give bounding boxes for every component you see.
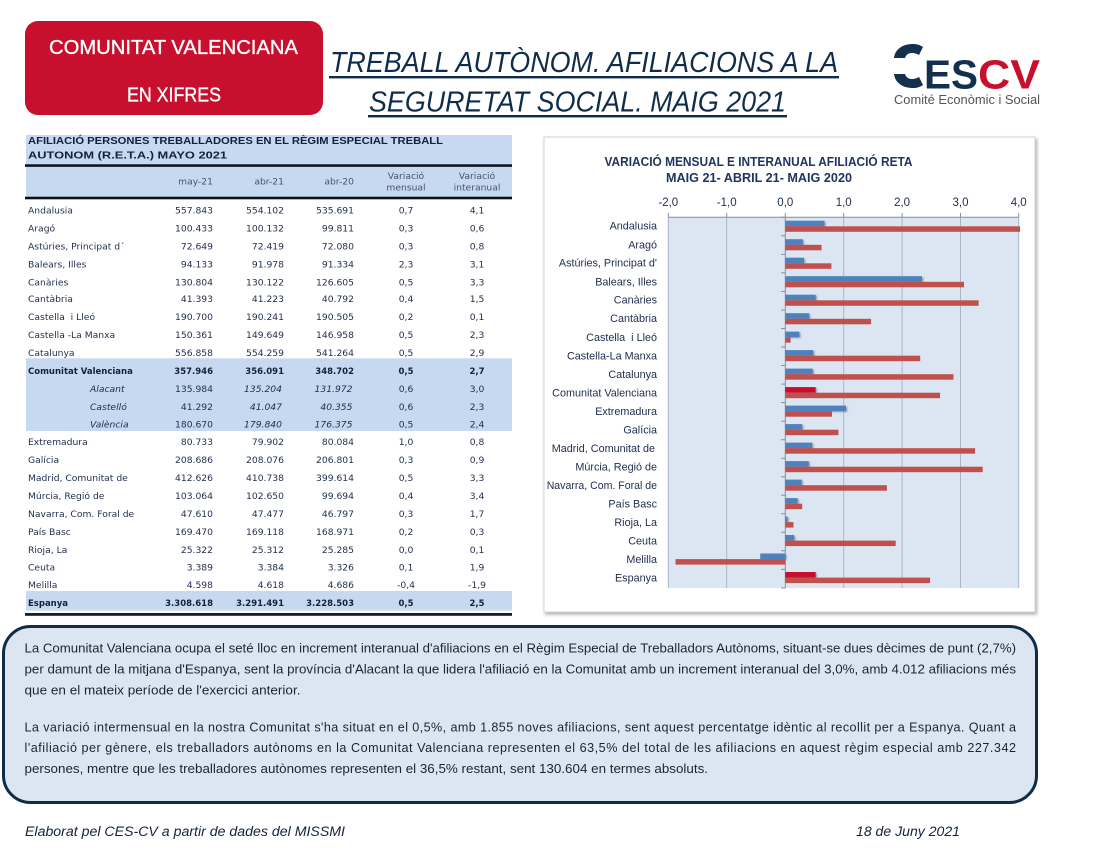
row: Madrid: 399.614: [316, 473, 354, 484]
row: Cantàbria: 41.393: [181, 294, 213, 305]
row: Castella-La Manxa: 146.958: [316, 330, 354, 341]
table header row: [25, 164, 512, 199]
row: Múrcia: 0,4: [399, 491, 413, 502]
axis labels: 1,0: [836, 197, 852, 209]
row: Aragó: 0,3: [399, 223, 413, 234]
chart title: VARIACIÓ MENSUAL E INTERANUAL AFILIACIÓ RETA: [604, 154, 913, 169]
badge: Comunitat Valenciana en xifres: COMUNITAT VALENCIANA: [49, 36, 298, 59]
row: Comunitat Valenciana: 348.702: [315, 367, 354, 377]
row: Extremadura: 0,8: [470, 437, 484, 448]
row: Extremadura: 80.084: [322, 437, 354, 448]
row: Espanya: Espanya: [28, 599, 68, 609]
category labels: Rioja, La: [614, 517, 657, 529]
row: Catalunya: 554.259: [246, 348, 284, 359]
chart title: [604, 154, 913, 185]
axis labels: -2,0: [658, 197, 678, 209]
axis labels: -1,0: [717, 197, 737, 209]
row: Castella i Lleó: [28, 312, 484, 323]
footer: source: Elaborat pel CES-CV a partir de dades del MISSMI: [25, 824, 345, 839]
category labels: Balears, Illes: [595, 276, 658, 288]
row: Extremadura: Extremadura: [28, 437, 88, 448]
row: Ceuta: 0,1: [399, 562, 413, 574]
row: Castella-La Manxa: 150.361: [175, 330, 213, 341]
row: País Basc: [28, 527, 484, 538]
category labels: Extremadura: [595, 406, 657, 418]
row: Comunitat Valenciana: 2,7: [469, 367, 485, 377]
row: Extremadura: 80.733: [181, 437, 213, 448]
row: Castella i Lleó: Castella i Lleó: [28, 312, 95, 323]
row: Castella i Lleó: 190.241: [246, 312, 284, 323]
category labels: Melilla: [626, 554, 657, 566]
row: Castella-La Manxa: 0,5: [399, 330, 413, 341]
row: Canàries: 130.122: [246, 277, 284, 288]
row: Navarra: 47.477: [252, 509, 284, 520]
row: Cantàbria: 0,4: [399, 294, 413, 305]
row: Galícia: 208.076: [246, 455, 284, 466]
row: Múrcia: [28, 491, 484, 502]
category labels: Espanya: [615, 572, 657, 584]
row: Alacant: 135.204: [244, 384, 282, 395]
row: Andalusia: [28, 205, 484, 216]
row: Canàries: 130.804: [175, 277, 213, 288]
row: Castella i Lleó: 0,2: [399, 312, 413, 323]
row: País Basc: 168.971: [316, 527, 354, 538]
row: Comunitat Valenciana: 356.091: [245, 367, 284, 377]
title: TREBALL AUTÒNOM. AFILIACIONS A LA: [330, 47, 838, 79]
row: Andalusia: 0,7: [399, 205, 413, 216]
row: Catalunya: [28, 348, 484, 359]
row: Balears: 94.133: [181, 259, 213, 270]
row: Navarra: 1,7: [470, 509, 484, 520]
row: Ceuta: [28, 562, 484, 574]
row: Galícia: 0,3: [399, 455, 413, 466]
row: Rioja: 25.312: [252, 545, 284, 556]
row: Cantàbria: 41.223: [252, 294, 284, 305]
row: Castella-La Manxa: [28, 330, 484, 341]
panel: bar chart: [544, 137, 1035, 612]
row: Andalusia: 4,1: [470, 205, 484, 216]
row: Alacant: 131.972: [314, 384, 353, 395]
bars: variació mensual: [760, 221, 922, 578]
row: Canàries: [28, 277, 484, 288]
row: Múrcia: 99.694: [322, 491, 354, 502]
row: Cantàbria: 40.792: [322, 294, 354, 305]
row: Rioja: 25.285: [322, 545, 354, 556]
row: Canàries: Canàries: [28, 277, 68, 288]
row: Catalunya: 0,5: [399, 348, 413, 359]
logo: CES-CV: [894, 44, 1041, 107]
row: Aragó: [28, 223, 484, 234]
row: València: València: [90, 420, 129, 430]
paragraph 2: [24, 720, 1016, 776]
row: Espanya: 0,5: [398, 599, 414, 609]
row: Madrid: 410.738: [246, 473, 284, 484]
category labels: Comunitat Valenciana: [552, 388, 657, 400]
row: País Basc: País Basc: [28, 527, 71, 538]
row: València: [90, 420, 484, 430]
row: Andalusia: 557.843: [175, 205, 213, 216]
table header row: abr-21: [254, 176, 284, 188]
category labels: Catalunya: [608, 369, 657, 381]
row: Aragó: 0,6: [470, 223, 484, 234]
highlight band: Comunitat Valenciana: [26, 358, 512, 431]
row: Rioja: [28, 545, 484, 556]
row: Castella-La Manxa: 2,3: [470, 330, 484, 341]
row: Navarra: 0,3: [399, 509, 413, 520]
table header row: Variació: [459, 171, 496, 182]
axis labels: 4,0: [1011, 197, 1027, 209]
highlight band: Espanya: [26, 591, 512, 610]
row: Balears: [28, 259, 484, 270]
row: Navarra: Navarra, Com. Foral de: [28, 509, 135, 520]
row: Navarra: [28, 509, 484, 520]
row: Múrcia: 102.650: [246, 491, 284, 502]
row: Castella i Lleó: 0,1: [470, 312, 484, 323]
row: Aragó: 100.433: [175, 223, 213, 234]
bars: variació interanual: [676, 226, 1020, 583]
table header row: may-21: [178, 176, 213, 188]
row: Catalunya: 556.858: [175, 348, 213, 359]
row: Comunitat Valenciana: 357.946: [174, 367, 213, 377]
row: Espanya: 3.308.618: [165, 599, 213, 609]
row: Melilla: 4.598: [187, 580, 213, 591]
row: Navarra: 47.610: [181, 509, 213, 520]
logo: CES-CV: ES: [924, 52, 978, 98]
axis labels: 3,0: [952, 197, 968, 209]
row: Catalunya: 541.264: [316, 348, 354, 359]
row: Madrid: 0,5: [399, 473, 413, 484]
row: Comunitat Valenciana: [28, 367, 485, 377]
row: Madrid: Madrid, Comunitat de: [28, 473, 128, 484]
row: València: 176.375: [314, 420, 353, 430]
row: Ceuta: 3.384: [258, 562, 284, 574]
row: Rioja: 25.322: [181, 545, 213, 556]
row: Espanya: 3.228.503: [306, 599, 354, 609]
title: [329, 47, 839, 118]
row: Cantàbria: 1,5: [470, 294, 484, 305]
row: Madrid: 3,3: [470, 473, 484, 484]
paragraph 1: que en el mateix període de l'exercici anterior.: [24, 684, 300, 698]
table header row: interanual: [454, 182, 500, 194]
row: Alacant: Alacant: [89, 384, 125, 395]
row: Castella i Lleó: 190.700: [175, 312, 213, 323]
row: Astúries: 0,8: [470, 241, 484, 252]
row: Extremadura: [28, 437, 484, 448]
row: Rioja: 0,1: [470, 545, 484, 556]
row: Castelló: 0,6: [399, 402, 413, 413]
row: Melilla: -1,9: [468, 580, 486, 591]
row: Andalusia: 535.691: [316, 205, 354, 216]
logo: CES-CV: Comité Econòmic i Social: [894, 93, 1040, 107]
footer: date: 18 de Juny 2021: [856, 824, 960, 839]
row: Castelló: 2,3: [470, 402, 484, 413]
axis labels: 2,0: [894, 197, 910, 209]
row: Aragó: 100.132: [246, 223, 284, 234]
row: Melilla: 4.686: [328, 580, 354, 591]
axis labels: 0,0: [777, 197, 793, 209]
row: Canàries: 126.605: [316, 277, 354, 288]
axis labels: [658, 197, 1027, 209]
row: Astúries: Astúries, Principat d´: [28, 241, 125, 252]
row: Ceuta: 3.326: [328, 562, 354, 574]
row: Castelló: 41.292: [181, 402, 213, 413]
table bottom rule: [25, 613, 512, 616]
title: SEGURETAT SOCIAL. MAIG 2021: [369, 86, 786, 118]
row: Madrid: 412.626: [175, 473, 213, 484]
row: Galícia: Galícia: [28, 455, 59, 466]
badge: Comunitat Valenciana en xifres: [25, 21, 323, 115]
row: Castella i Lleó: 190.505: [316, 312, 354, 323]
row: Extremadura: 79.902: [252, 437, 284, 448]
row: País Basc: 169.470: [175, 527, 213, 538]
row: Ceuta: Ceuta: [28, 562, 55, 574]
row: Comunitat Valenciana: 0,5: [398, 367, 414, 377]
chart title: MAIG 21- ABRIL 21- MAIG 2020: [666, 170, 852, 185]
row: Andalusia: Andalusia: [28, 205, 73, 216]
row: Canàries: 0,5: [399, 277, 413, 288]
row: Navarra: 46.797: [322, 509, 354, 520]
row: Melilla: 4.618: [258, 580, 284, 591]
row: Castelló: [90, 402, 484, 413]
row: Cantàbria: [28, 294, 484, 305]
row: València: 180.670: [175, 420, 213, 430]
row: Balears: 91.334: [322, 259, 354, 270]
row: Alacant: 3,0: [470, 384, 484, 395]
row: Alacant: 0,6: [399, 384, 413, 395]
category labels: Aragó: [628, 240, 657, 252]
row: Comunitat Valenciana: Comunitat Valenciana: [28, 367, 133, 377]
row: Astúries: 72.080: [322, 241, 354, 252]
logo: CES-CV: CV: [978, 52, 1041, 98]
row: Galícia: 206.801: [316, 455, 354, 466]
category labels: Astúries, Principat d': [559, 258, 657, 270]
row: Astúries: 72.419: [252, 241, 284, 252]
panel: data table: [25, 134, 512, 616]
row: Astúries: 0,3: [399, 241, 413, 252]
row: Melilla: [28, 580, 486, 591]
table header row: abr-20: [324, 176, 354, 188]
row: València: 2,4: [470, 420, 484, 430]
category labels: Castella i Lleó: [586, 332, 657, 344]
category labels: Andalusia: [610, 220, 657, 232]
row: València: 0,5: [399, 420, 413, 430]
table title: [26, 134, 512, 164]
table title: AUTONOM (R.E.T.A.) MAYO 2021: [28, 150, 227, 162]
row: Castelló: 40.355: [320, 402, 353, 413]
row: Castella-La Manxa: Castella -La Manxa: [28, 330, 115, 341]
paragraph 2: La variació intermensual en la nostra Comunitat s'ha situat en el 0,5%, amb 1.855 noves afiliacions, sent aquest percentatge idèntic al recollit per a Espanya. Quant a: [24, 720, 1016, 734]
row: Canàries: 3,3: [470, 277, 484, 288]
row: País Basc: 0,2: [399, 527, 413, 538]
row: Balears: 3,1: [470, 259, 484, 270]
paragraph 2: persones, mentre que les treballadores autònomes representen el 36,5% restant, sent 130.604 en termes absoluts.: [24, 762, 708, 776]
row: Castella-La Manxa: 149.649: [246, 330, 284, 341]
row: Ceuta: 1,9: [470, 562, 484, 574]
row: Rioja: 0,0: [399, 545, 413, 556]
row: Astúries: 72.649: [181, 241, 213, 252]
plot background and grid: [668, 213, 1019, 588]
row: Catalunya: 2,9: [470, 348, 484, 359]
category labels: País Basc: [608, 498, 658, 510]
table header row: mensual: [386, 182, 426, 194]
row: Espanya: [28, 599, 485, 609]
row: País Basc: 0,3: [470, 527, 484, 538]
row: Balears: 2,3: [399, 259, 413, 270]
row: Múrcia: Múrcia, Regió de: [28, 491, 105, 502]
category labels: Múrcia, Regió de: [575, 462, 657, 474]
category labels: Madrid, Comunitat de: [552, 443, 655, 455]
row: Catalunya: Catalunya: [28, 348, 75, 359]
row: Múrcia: 103.064: [175, 491, 213, 502]
category labels: Navarra, Com. Foral de: [547, 480, 657, 492]
category labels: Castella-La Manxa: [567, 350, 657, 362]
row: Balears: 91.978: [252, 259, 284, 270]
row: València: 179.840: [244, 420, 282, 430]
row: Aragó: 99.811: [322, 223, 354, 234]
category labels: [547, 220, 658, 584]
row: Balears: Balears, Illes: [28, 259, 87, 270]
paragraph 2: l'afiliació per gènere, els treballadors autònoms en la Comunitat Valenciana representen el 63,5% del total de les afiliacions en aquest règim especial amb 227.342: [24, 741, 1016, 755]
paragraph 1: [24, 642, 1016, 698]
row: Castelló: 41.047: [250, 402, 282, 413]
chart frame: [544, 137, 1035, 612]
row: Madrid: [28, 473, 484, 484]
table title: AFILIACIÓ PERSONES TREBALLADORES EN EL RÈGIM ESPECIAL TREBALL: [28, 134, 444, 147]
category labels: Ceuta: [628, 536, 657, 548]
paragraph 1: per damunt de la mitjana d'Espanya, sent la província d'Alacant la que lidera l'afiliació en la Comunitat amb un increment interanual del 3,0%, amb 4.012 afiliacions més: [24, 662, 1016, 676]
row: Cantàbria: Cantàbria: [28, 294, 73, 305]
row: Múrcia: 3,4: [470, 491, 484, 502]
row: Aragó: Aragó: [28, 223, 56, 234]
badge: Comunitat Valenciana en xifres: EN XIFRES: [127, 84, 221, 106]
row: Galícia: [28, 455, 484, 466]
paragraph 1: La Comunitat Valenciana ocupa el seté lloc en increment interanual d'afiliacions en el Règim Especial de Treballadors Autònoms, situant-se dues dècimes de punt (2,7%): [24, 642, 1016, 656]
row: Ceuta: 3.389: [187, 562, 213, 574]
row: País Basc: 169.118: [246, 527, 284, 538]
row: Castelló: Castelló: [90, 402, 127, 413]
category labels: Galícia: [623, 424, 657, 436]
category labels: Cantàbria: [610, 313, 657, 325]
row: Alacant: [89, 384, 484, 395]
row: Espanya: 3.291.491: [236, 599, 284, 609]
row: Astúries: [28, 241, 484, 252]
row: Galícia: 0,9: [470, 455, 484, 466]
row: Galícia: 208.686: [175, 455, 213, 466]
row: Melilla: Melilla: [28, 580, 57, 591]
category labels: Canàries: [614, 294, 658, 306]
row: Espanya: 2,5: [469, 599, 485, 609]
table header row: Variació: [388, 171, 425, 182]
panel: commentary text box: [4, 626, 1036, 802]
row: Rioja: Rioja, La: [28, 545, 67, 556]
row: Alacant: 135.984: [175, 384, 213, 395]
row: Extremadura: 1,0: [399, 437, 413, 448]
row: Andalusia: 554.102: [246, 205, 284, 216]
row: Melilla: -0,4: [397, 580, 415, 591]
